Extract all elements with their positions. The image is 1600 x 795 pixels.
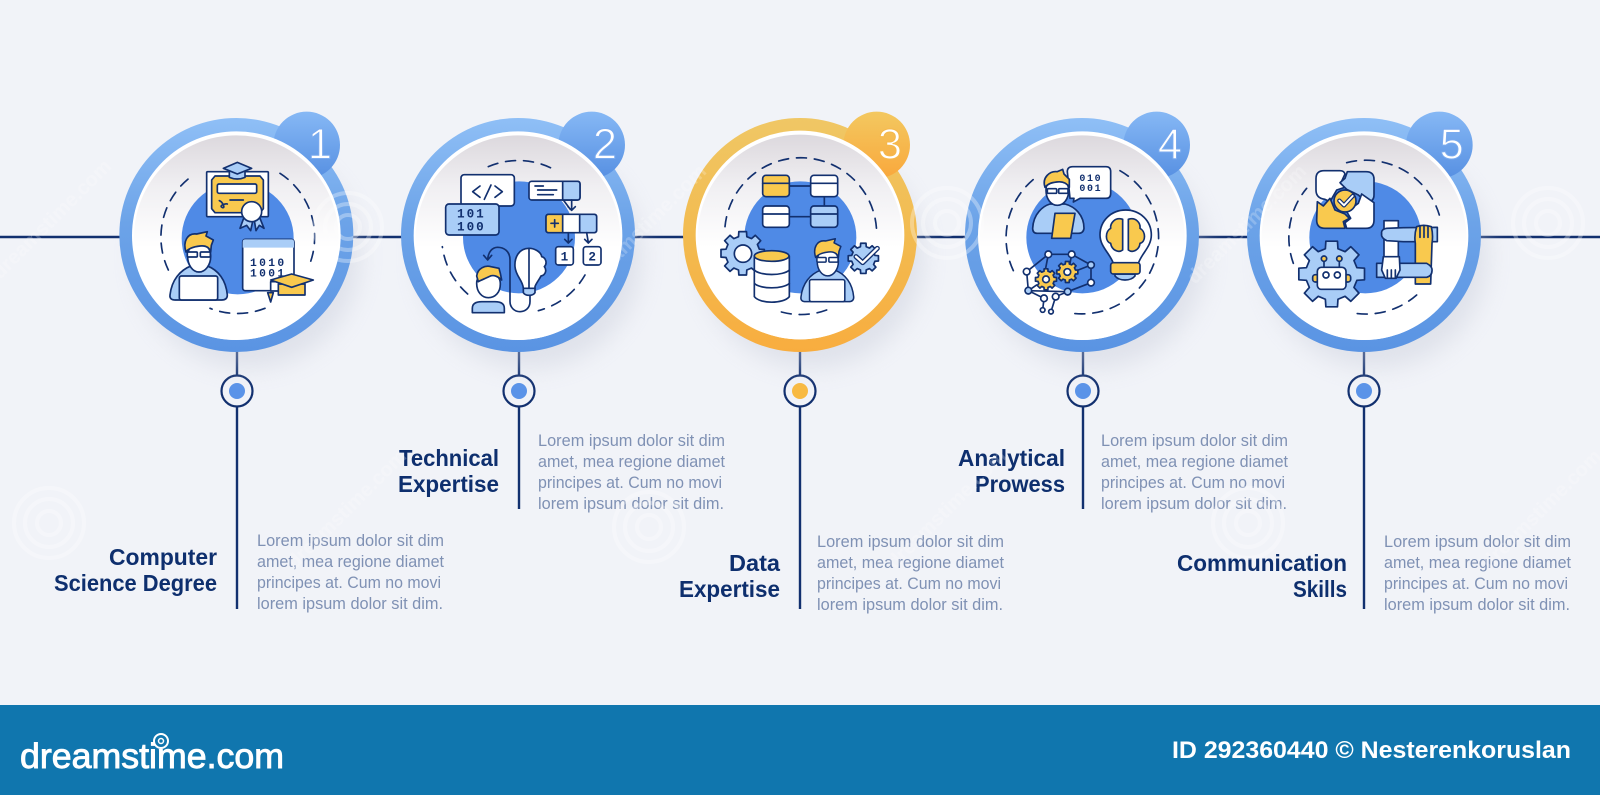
text block 5: lorem ipsum dolor sit dim. xyxy=(1384,596,1570,614)
text block 5: amet, mea regione diamet xyxy=(1384,554,1571,572)
icon: neural network with gears xyxy=(1023,251,1094,314)
icon: robot gear xyxy=(1299,241,1364,307)
step 4: analytical prowess xyxy=(958,112,1288,513)
icon: speech bubbles puzzle xyxy=(1316,171,1374,228)
connector and marker 3 xyxy=(784,340,816,609)
text block 4 xyxy=(1101,432,1288,513)
icon: person xyxy=(472,266,504,313)
circle panel 2: 2 xyxy=(593,121,617,169)
text block 2 xyxy=(538,432,725,513)
step 2: technical expertise xyxy=(398,112,725,513)
text block 3 xyxy=(817,533,1004,614)
title 3 xyxy=(679,550,780,602)
title 5: Communication xyxy=(1177,550,1347,576)
connector and marker 5 xyxy=(1348,340,1380,609)
text block 5: Lorem ipsum dolor sit dim xyxy=(1384,533,1571,551)
icon: algorithm blocks xyxy=(529,181,601,265)
text block 4: Lorem ipsum dolor sit dim xyxy=(1101,432,1288,450)
icon: database xyxy=(754,251,789,302)
title 1: Science Degree xyxy=(54,570,217,596)
title 4: Prowess xyxy=(975,471,1065,497)
icon: analyst with tablet: 010 xyxy=(1079,173,1102,184)
icon: gear xyxy=(721,232,764,275)
text block 3: principes at. Cum no movi xyxy=(817,575,1001,593)
text block 4: lorem ipsum dolor sit dim. xyxy=(1101,495,1287,513)
text block 4: amet, mea regione diamet xyxy=(1101,453,1288,471)
step 3: data expertise xyxy=(679,112,1004,614)
text block 1: amet, mea regione diamet xyxy=(257,553,444,571)
icon: code windows: 100 xyxy=(457,220,486,235)
icon: analyst with laptop xyxy=(801,239,854,302)
text block 1: lorem ipsum dolor sit dim. xyxy=(257,595,443,613)
watermark text: dreamstime.com xyxy=(283,446,411,574)
text block 1: Lorem ipsum dolor sit dim xyxy=(257,532,444,550)
title 2: Expertise xyxy=(398,471,499,497)
icon: analyst with tablet: 001 xyxy=(1079,183,1102,194)
icon: code windows: 101 xyxy=(457,206,486,221)
icon: binary window: 1001 xyxy=(250,269,287,281)
text block 3: Lorem ipsum dolor sit dim xyxy=(817,533,1004,551)
watermark text: dreamstime.com xyxy=(883,446,1011,574)
text block 4: principes at. Cum no movi xyxy=(1101,474,1285,492)
watermark text: dreamstime.com xyxy=(1183,161,1311,289)
title 5 xyxy=(1177,550,1347,602)
text block 2: amet, mea regione diamet xyxy=(538,453,725,471)
text block 2: principes at. Cum no movi xyxy=(538,474,722,492)
title 1 xyxy=(54,544,217,596)
icon: certificate xyxy=(207,162,268,231)
title 2 xyxy=(398,445,499,497)
circle panel 2 xyxy=(401,112,642,368)
circle panel 3: 3 xyxy=(878,121,902,169)
title 2: Technical xyxy=(399,445,499,471)
text block 5 xyxy=(1384,533,1571,614)
title 4: Analytical xyxy=(958,445,1065,471)
text block 2: lorem ipsum dolor sit dim. xyxy=(538,495,724,513)
circle panel 5 xyxy=(1247,112,1488,368)
watermark text: dreamstime.com xyxy=(583,161,711,289)
icon: code windows xyxy=(446,175,514,235)
footer banner xyxy=(0,705,1600,795)
title 4 xyxy=(958,445,1065,497)
text block 3: amet, mea regione diamet xyxy=(817,554,1004,572)
circle panel 3 xyxy=(683,112,924,368)
icon: algorithm blocks: 2 xyxy=(588,249,596,264)
watermark text xyxy=(0,156,1600,574)
step 5: communication skills xyxy=(1177,112,1571,614)
title 5: Skills xyxy=(1293,576,1347,602)
footer logo: dreamstime.com xyxy=(20,737,284,776)
icon: linked hands xyxy=(1377,221,1437,284)
horizontal timeline line xyxy=(0,236,1600,238)
icon: data flow blocks xyxy=(763,175,838,227)
circle panel 4: 4 xyxy=(1158,121,1182,169)
icon: algorithm blocks: 1 xyxy=(561,249,569,264)
circle panel 1 xyxy=(119,112,360,368)
circle panel 4 xyxy=(965,112,1206,368)
icon: light bulb brain xyxy=(484,247,546,312)
text block 1: principes at. Cum no movi xyxy=(257,574,441,592)
icon: checked gear xyxy=(848,243,878,273)
circle panel 5: 5 xyxy=(1440,121,1464,169)
title 1: Computer xyxy=(109,544,217,570)
footer image id: ID 292360440 © Nesterenkoruslan xyxy=(1172,737,1571,764)
icon: binary window: 1010 xyxy=(250,258,287,270)
connector and marker 1 xyxy=(222,340,252,609)
watermark spirals xyxy=(14,188,1583,562)
icon: brain in bulb xyxy=(1100,210,1151,280)
text block 5: principes at. Cum no movi xyxy=(1384,575,1568,593)
icon: student with laptop xyxy=(170,232,227,300)
connector and marker 2 xyxy=(504,340,534,509)
circle panel 1: 1 xyxy=(308,121,332,169)
connector and marker 4 xyxy=(1068,340,1098,509)
icon: analyst with tablet xyxy=(1033,167,1111,238)
text block 1 xyxy=(257,532,444,613)
title 3: Expertise xyxy=(679,576,780,602)
text block 3: lorem ipsum dolor sit dim. xyxy=(817,596,1003,614)
icon: binary window xyxy=(243,239,294,291)
text block 2: Lorem ipsum dolor sit dim xyxy=(538,432,725,450)
title 3: Data xyxy=(729,550,780,576)
icon: graduation cap xyxy=(268,274,313,302)
step 1: computer science degree xyxy=(54,112,444,613)
